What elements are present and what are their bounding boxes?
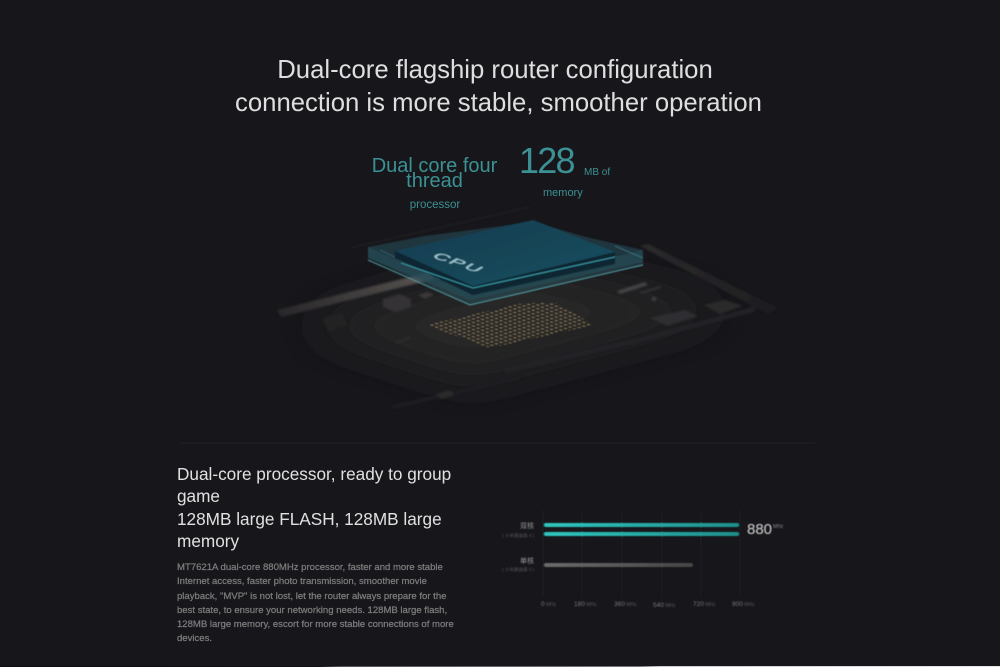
stat: memory: 128 <box>519 140 574 181</box>
divider <box>180 442 815 444</box>
subheading: game <box>177 486 220 506</box>
axis labels <box>541 601 755 609</box>
title <box>235 56 762 117</box>
chip label: CPU <box>428 251 489 275</box>
body text: best state, to ensure your networking needs. 128MB large flash, <box>177 605 447 616</box>
subheading: 128MB large FLASH, 128MB large <box>177 509 442 529</box>
stat: memory <box>519 140 610 198</box>
body text <box>177 562 454 644</box>
body text: devices. <box>177 633 212 644</box>
dual-core bars <box>544 523 739 536</box>
title: Dual-core flagship router configuration <box>277 56 713 84</box>
axis labels: 0 MHz <box>541 601 557 608</box>
CPU chip <box>395 220 615 295</box>
body text: 128MB large memory, escort for more stable connections of more <box>177 619 454 630</box>
stat: processor: thread <box>406 170 463 192</box>
subheading <box>177 464 451 551</box>
axis labels: 720 MHz <box>693 601 716 608</box>
body text: MT7621A dual-core 880MHz processor, faster and more stable <box>177 562 443 573</box>
row labels: ( 小米路由器 3 ) <box>502 566 534 573</box>
bar chart: core frequency <box>502 510 784 609</box>
single-core bar <box>544 563 693 567</box>
title: connection is more stable, smoother operation <box>235 89 762 117</box>
circuit board <box>277 207 778 407</box>
axis labels: 900 MHz <box>732 601 755 608</box>
subheading: memory <box>177 531 239 551</box>
row labels: 单核 <box>520 556 534 565</box>
stat: processor: processor <box>410 198 460 210</box>
stat: processor: Dual core four <box>372 155 497 177</box>
axis labels: 540 MHz <box>653 602 676 609</box>
stat: memory: MB of <box>584 166 610 178</box>
axis labels: 180 MHz <box>574 601 597 608</box>
solder dot grid <box>426 303 594 348</box>
glass plate under chip <box>368 222 643 305</box>
body text: playback, "MVP" is not lost, let the router always prepare for the <box>177 590 446 602</box>
axis labels: 360 MHz <box>614 601 637 608</box>
row labels: 双核 <box>520 521 534 530</box>
row labels <box>502 521 534 573</box>
body text: Internet access, faster photo transmission, smoother movie <box>177 576 427 587</box>
subheading: Dual-core processor, ready to group <box>177 464 451 484</box>
row labels: ( 小米路由器 4 ) <box>502 532 534 539</box>
value label: 880 <box>747 521 772 538</box>
stat: memory: memory <box>543 186 583 198</box>
value label: MHz <box>773 524 784 530</box>
stat: processor <box>372 155 497 210</box>
